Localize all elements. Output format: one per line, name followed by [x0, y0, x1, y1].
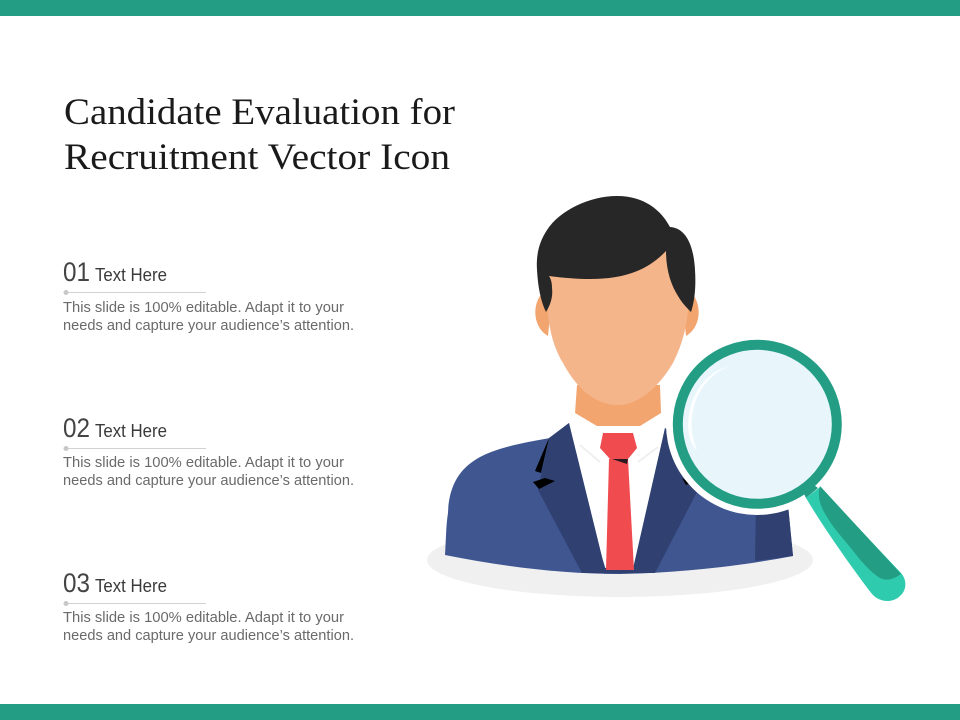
text block 02: Text Here — [95, 421, 167, 441]
lapel notches — [533, 438, 690, 489]
lens highlight — [688, 366, 730, 451]
title: Recruitment Vector Icon — [64, 137, 450, 178]
text block 03: needs and capture your audience’s attention. — [63, 628, 354, 644]
magnifying glass — [666, 333, 905, 601]
face — [548, 225, 688, 405]
jacket — [445, 423, 793, 574]
lapel base — [604, 568, 634, 574]
text block 01 — [63, 257, 354, 334]
shirt — [569, 408, 665, 570]
tie — [600, 433, 637, 570]
left lapel — [538, 423, 606, 573]
ears — [535, 296, 699, 336]
text block 02 — [63, 413, 354, 489]
collar folds — [580, 445, 658, 462]
text block 01: 01 — [63, 257, 90, 287]
title — [64, 92, 455, 178]
white halo — [666, 333, 848, 515]
right lapel — [632, 428, 700, 573]
bottom bar — [0, 704, 960, 720]
text block 03: 03 — [63, 568, 90, 598]
handle — [806, 487, 905, 601]
text block 01: This slide is 100% editable. Adapt it to your — [63, 300, 344, 316]
text block 02: 02 — [63, 413, 90, 443]
neck — [575, 385, 661, 426]
ground shadow — [427, 523, 813, 597]
ring connector — [803, 483, 818, 498]
top bar — [0, 0, 960, 16]
text block 02: This slide is 100% editable. Adapt it to your — [63, 455, 344, 471]
text block 02: needs and capture your audience’s attention. — [63, 473, 354, 489]
title: Candidate Evaluation for — [64, 92, 455, 133]
hair — [537, 196, 695, 312]
text block 01: Text Here — [95, 265, 167, 285]
jacket side shade — [755, 505, 793, 561]
lens ring — [678, 345, 837, 504]
text block 01: needs and capture your audience’s attention. — [63, 318, 354, 334]
text block 03 — [63, 568, 354, 644]
handle shade — [819, 486, 901, 580]
text block 03: Text Here — [95, 576, 167, 596]
icon: businessman and magnifying glass — [427, 196, 905, 601]
text block 03: This slide is 100% editable. Adapt it to your — [63, 610, 344, 626]
